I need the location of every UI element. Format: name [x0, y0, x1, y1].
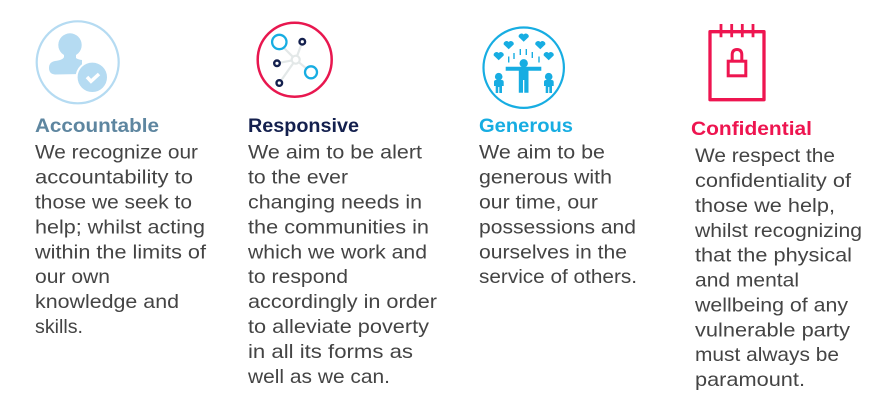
- text: accountable description: within the limits of: [34, 242, 207, 264]
- text: generous description: We aim to be: [479, 142, 605, 164]
- text: confidential description: must always be: [695, 344, 839, 366]
- text: accountable description: those we seek to: [35, 192, 192, 214]
- text: generous description: service of others.: [479, 266, 637, 288]
- icon: person giving with hearts: [484, 27, 564, 108]
- panel: responsive: [247, 23, 438, 388]
- text: responsive description: [247, 142, 438, 388]
- text: generous description: ourselves in the: [479, 242, 627, 264]
- text: responsive description: to the ever: [248, 166, 349, 188]
- text: confidential description: those we help,: [695, 195, 835, 217]
- text: generous description: generous with: [479, 166, 612, 188]
- text: confidential description: and mental: [695, 270, 799, 292]
- text: confidential description: whilst recognizing: [694, 220, 862, 242]
- text: responsive description: accordingly in order: [248, 291, 438, 313]
- heading: Confidential: Confidential: [691, 118, 812, 140]
- text: responsive description: which we work and: [247, 242, 427, 264]
- text: responsive description: to respond: [248, 266, 348, 288]
- text: responsive description: in all its forms as: [248, 341, 413, 363]
- text: confidential description: wellbeing of any: [694, 294, 848, 316]
- text: accountable description: knowledge and: [35, 291, 179, 313]
- text: confidential description: confidentiality of: [695, 170, 852, 192]
- text: accountable description: accountability to: [35, 166, 193, 188]
- text: confidential description: We respect the: [695, 145, 835, 167]
- text: accountable description: help; whilst acting: [35, 216, 205, 238]
- text: generous description: our time, our: [479, 192, 599, 214]
- panel: generous: [479, 27, 637, 288]
- heading: Responsive: Responsive: [248, 115, 359, 137]
- text: confidential description: vulnerable party: [695, 320, 850, 342]
- text: responsive description: well as we can.: [247, 366, 390, 388]
- text: confidential description: [694, 145, 862, 391]
- icon: network nodes: [258, 23, 332, 97]
- text: responsive description: changing needs in: [248, 192, 422, 214]
- text: accountable description: [34, 142, 207, 338]
- text: responsive description: to alleviate poverty: [248, 316, 429, 338]
- text: generous description: possessions and: [479, 216, 636, 238]
- text: confidential description: that the physical: [695, 244, 852, 266]
- text: responsive description: We aim to be alert: [248, 142, 423, 164]
- text: generous description: [479, 142, 637, 288]
- panel: confidential: [691, 24, 862, 391]
- heading: Generous: Generous: [479, 115, 573, 137]
- text: responsive description: the communities in: [248, 216, 429, 238]
- heading: Accountable: Accountable: [35, 115, 159, 137]
- icon: notebook with padlock: [710, 24, 764, 100]
- text: confidential description: paramount.: [695, 369, 805, 391]
- icon: person with check mark: [37, 21, 119, 103]
- text: accountable description: skills.: [35, 316, 83, 338]
- text: accountable description: our own: [35, 266, 110, 288]
- text: accountable description: We recognize our: [35, 142, 199, 164]
- panel: accountable: [34, 21, 207, 338]
